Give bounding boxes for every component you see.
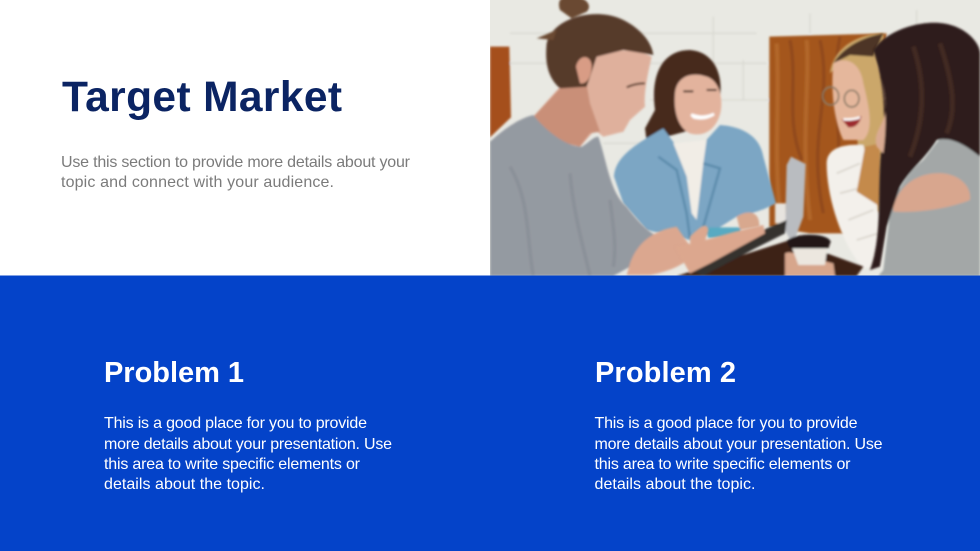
person: woman with long dark hair in grey top <box>870 23 980 276</box>
panel: problem 2 <box>594 357 883 493</box>
person: man in grey shirt <box>490 0 695 276</box>
heading: problem 1: Problem 1 <box>104 357 244 389</box>
text block: intro: Use this section to provide more details about your <box>61 154 411 171</box>
text block: problem 2 description: this area to write specific elements or <box>594 456 851 473</box>
text block: problem 2 description <box>594 415 883 493</box>
text block: problem 1 description: more details about your presentation. Use <box>104 436 392 453</box>
text block: problem 1 description: this area to write specific elements or <box>104 456 361 473</box>
text block: problem 1 description <box>104 415 392 493</box>
text block: problem 2 description: more details about your presentation. Use <box>594 436 883 453</box>
text block: problem 1 description: details about the topic. <box>104 476 265 493</box>
text block: problem 2 description: details about the topic. <box>594 476 756 493</box>
panel: problem 1 <box>104 357 392 493</box>
table, laptop, tablet and coffee cup <box>675 157 863 276</box>
panel: white header background <box>0 0 490 276</box>
panel: blue problems background <box>0 276 980 551</box>
photo: four people talking at a table <box>490 0 980 276</box>
text block: intro <box>61 154 411 191</box>
text block: problem 2 description: This is a good place for you to provide <box>594 415 858 432</box>
text block: problem 1 description: This is a good place for you to provide <box>104 415 367 432</box>
person: woman with glasses and white sweater <box>823 33 890 268</box>
text block: intro: topic and connect with your audience. <box>61 174 334 191</box>
person: woman in denim shirt <box>614 50 776 240</box>
title: Target Market <box>62 74 342 121</box>
heading: problem 2: Problem 2 <box>595 357 736 389</box>
